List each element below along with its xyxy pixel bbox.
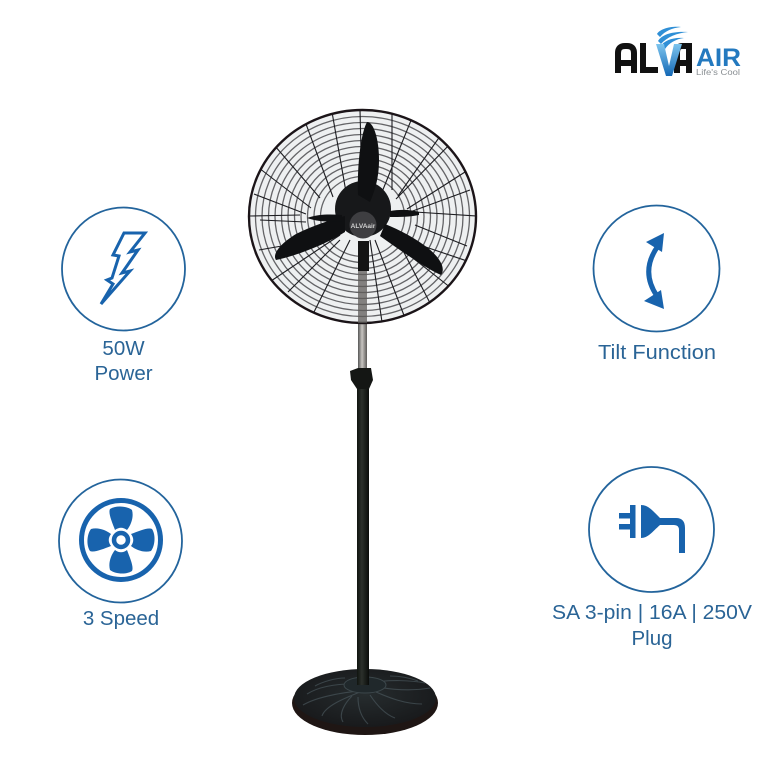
plug symbol — [619, 505, 685, 553]
fan hub — [114, 533, 128, 547]
logo wordmark V — [656, 44, 682, 76]
fan hub cap — [350, 212, 376, 238]
icon: plug — [552, 467, 752, 650]
fan stem behind guard — [358, 245, 367, 323]
plug circle — [589, 467, 714, 592]
fan blades — [87, 506, 155, 574]
fan guard spokes — [250, 110, 476, 322]
label: 50W Power: 50W — [102, 337, 145, 360]
fan ring — [82, 500, 160, 580]
fan base — [292, 669, 438, 735]
height clamp — [350, 368, 373, 389]
tilt circle — [594, 206, 720, 332]
fan guard rings — [248, 110, 476, 324]
icon: tilt function — [594, 206, 720, 364]
chrome stem — [358, 322, 367, 372]
fan motor — [335, 181, 391, 237]
hub brand: ALVAair — [351, 223, 376, 230]
label: Tilt Function: Tilt Function — [598, 341, 716, 364]
icon: 50W power — [62, 208, 185, 385]
lightning bolt — [101, 233, 145, 304]
label: 3 Speed: 3 Speed — [83, 607, 159, 630]
tilt knob — [358, 241, 369, 271]
product: stand fan — [248, 110, 476, 735]
label: SA 3-pin | 16A | 250V Plug: SA 3-pin | 16A | 250V — [552, 601, 752, 624]
speed circle — [59, 480, 182, 602]
fan blades — [275, 122, 443, 275]
label: 50W Power: Power — [94, 362, 153, 385]
power circle — [62, 208, 185, 330]
logo wordmark A L A — [618, 43, 689, 73]
logo wordmark AIR: AIR — [696, 44, 741, 72]
tilt double arrow — [644, 233, 664, 309]
fan guard outer rim — [249, 110, 476, 323]
logo: Alva Air — [618, 27, 741, 77]
pole — [357, 386, 369, 685]
logo tagline: Life's Cool — [696, 67, 740, 77]
logo swoosh — [657, 27, 688, 49]
icon: 3 speed — [59, 480, 182, 630]
label: SA 3-pin | 16A | 250V Plug: Plug — [631, 627, 673, 650]
